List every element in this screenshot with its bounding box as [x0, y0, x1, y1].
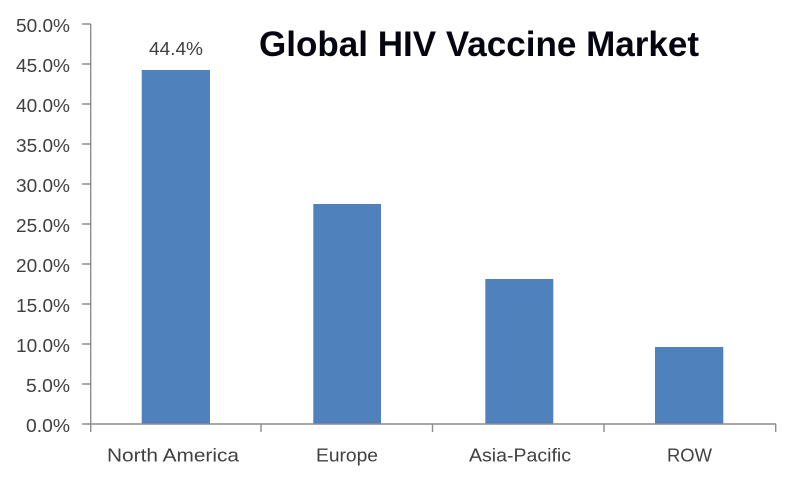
x axis labels: ROW	[667, 446, 712, 466]
y axis labels: 20.0%	[16, 256, 70, 276]
y axis labels: 30.0%	[16, 176, 70, 196]
y axis labels: 50.0%	[16, 16, 70, 36]
x axis labels: Asia-Pacific	[469, 446, 571, 466]
y axis labels: 35.0%	[16, 136, 70, 156]
x axis labels: Europe	[316, 446, 378, 466]
x axis labels: North America	[107, 446, 240, 466]
data label: 44.4%	[149, 39, 203, 59]
y axis	[82, 24, 91, 424]
x axis	[90, 424, 776, 432]
y axis labels: 45.0%	[16, 56, 70, 76]
y axis labels	[16, 16, 70, 436]
bar: ROW	[655, 347, 723, 424]
y axis labels: 25.0%	[16, 216, 70, 236]
y axis labels: 10.0%	[16, 336, 70, 356]
bar: North America	[142, 70, 210, 424]
bars	[142, 70, 723, 424]
y axis labels: 15.0%	[16, 296, 70, 316]
y axis labels: 0.0%	[26, 416, 70, 436]
bar: Asia-Pacific	[485, 279, 553, 424]
y axis labels: 5.0%	[26, 376, 70, 396]
x axis labels	[107, 446, 712, 466]
title: Global HIV Vaccine Market	[259, 25, 699, 64]
bar: Europe	[313, 204, 381, 424]
y axis labels: 40.0%	[16, 96, 70, 116]
